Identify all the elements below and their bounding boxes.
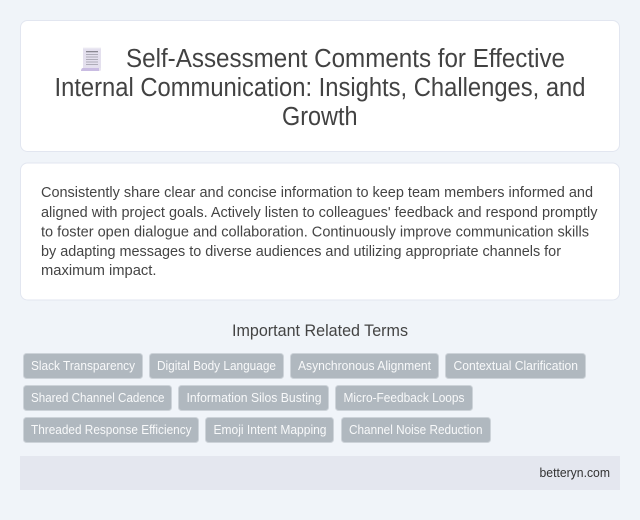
tag: Emoji Intent Mapping (206, 418, 334, 442)
tag: Micro-Feedback Loops: Micro-Feedback Loops (344, 391, 464, 405)
summary paragraph: by adapting messages to diverse audiences and utilizing appropriate channels for (41, 243, 561, 260)
title text (54, 45, 586, 131)
tag: Channel Noise Reduction: Channel Noise Reduction (349, 423, 483, 437)
tag: Threaded Response Efficiency: Threaded Response Efficiency (31, 423, 192, 437)
footer source text: betteryn.com (540, 466, 610, 480)
tag: Contextual Clarification: Contextual Clarification (454, 359, 578, 373)
tag: Micro-Feedback Loops (336, 386, 472, 410)
summary paragraph (41, 184, 598, 279)
heading: important related terms: Important Related Terms (232, 322, 408, 340)
tag: Asynchronous Alignment (290, 354, 438, 378)
tag group: related terms (24, 354, 586, 442)
panel: title card (20, 20, 620, 152)
tag: Slack Transparency: Slack Transparency (31, 359, 136, 373)
summary paragraph: aligned with project goals. Actively listen to colleagues' feedback and respond promptly (41, 204, 598, 221)
summary paragraph: maximum impact. (41, 262, 156, 279)
title text: Self-Assessment Comments for Effective (126, 45, 565, 73)
title text: Growth (282, 103, 358, 131)
tag: Contextual Clarification (446, 354, 586, 378)
tag: Slack Transparency (24, 354, 142, 378)
tag: Channel Noise Reduction (342, 418, 490, 442)
tag: Digital Body Language (150, 354, 284, 378)
tag: Emoji Intent Mapping: Emoji Intent Mapping (214, 423, 327, 437)
title text: Internal Communication: Insights, Challenges, and (54, 74, 586, 102)
tag: Shared Channel Cadence: Shared Channel Cadence (31, 391, 165, 405)
tag: Information Silos Busting: Information Silos Busting (186, 391, 322, 405)
panel: summary card (20, 163, 620, 300)
summary paragraph: to foster open dialogue and collaboration. Continuously improve communication skills (41, 224, 589, 240)
tag: Asynchronous Alignment: Asynchronous Alignment (298, 359, 431, 373)
tag: Threaded Response Efficiency (24, 418, 198, 442)
icon: receipt document (81, 48, 101, 71)
tag: Digital Body Language: Digital Body Language (157, 359, 276, 373)
footer bar (20, 456, 620, 490)
summary paragraph: Consistently share clear and concise information to keep team members informed and (41, 184, 593, 201)
tag: Information Silos Busting (178, 386, 328, 410)
tag: Shared Channel Cadence (24, 386, 172, 410)
